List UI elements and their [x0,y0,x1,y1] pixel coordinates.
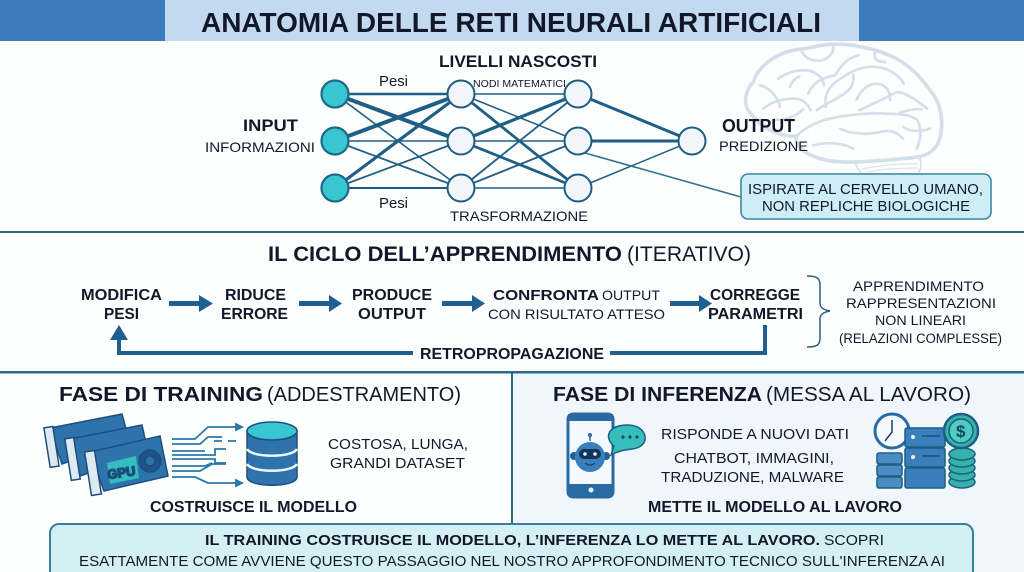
step: confronta output: OUTPUT [602,287,660,303]
network labels: NODI MATEMATICI [473,79,566,90]
step: modifica pesi [81,287,162,323]
heading: inference [553,384,971,406]
text: builds the model: COSTRUISCE IL MODELLO [150,499,357,516]
neural network diagram [322,80,741,202]
text: inference uses [661,426,849,486]
heading: inference: FASE DI INFERENZA [553,384,762,406]
step: riduce errore: ERRORE [221,306,288,323]
step: confronta output: CON RISULTATO ATTESO [488,306,665,322]
step: riduce errore [221,287,288,323]
heading: learning cycle: (ITERATIVO) [627,243,751,266]
speech bubble [608,425,645,455]
network labels: INPUT [243,116,299,135]
step: produce output [352,287,432,323]
step: modifica pesi: MODIFICA [81,287,162,304]
network labels: Pesi [379,195,408,212]
weights: input to hidden 1 [335,94,461,188]
step: confronta output [488,287,665,322]
network labels [205,52,808,224]
text: inference uses: RISPONDE A NUOVI DATI [661,426,849,443]
text: inference uses: CHATBOT, IMMAGINI, [674,450,834,467]
gpu card middle [65,425,148,480]
step: riduce errore: RIDUCE [225,287,286,304]
arrow: backpropagation loop [110,325,765,353]
icon: phone with chatbot [568,414,645,497]
text: non-linear representations: (RELAZIONI COMPLESSE) [839,331,1002,346]
callout: brain inspiration [741,174,991,219]
callout: brain inspiration: NON REPLICHE BIOLOGICHE [762,198,970,215]
heading: training [59,384,461,406]
large server [905,428,945,488]
panel: inference background [512,373,1024,572]
network labels: TRASFORMAZIONE [450,208,588,224]
icon: clock servers coins [875,414,978,488]
heading: training: FASE DI TRAINING [59,384,263,406]
text: inference uses: TRADUZIONE, MALWARE [661,469,844,486]
step: corregge parametri: PARAMETRI [708,306,803,323]
step: modifica pesi: PESI [104,306,139,323]
gpu card back [44,414,129,467]
gpu card front: GPU [106,463,136,482]
header band [0,0,1024,41]
coin stack: $ [956,422,966,441]
heading: inference: (MESSA AL LAVORO) [766,384,971,406]
hidden and output nodes [448,80,706,202]
small server [877,453,902,488]
callout connector [585,153,741,197]
icon: data flow [172,424,242,486]
network labels: LIVELLI NASCOSTI [439,52,597,71]
step: corregge parametri: CORREGGE [710,287,800,304]
text: puts the model to work: METTE IL MODELLO AL LAVORO [648,499,902,516]
clock [875,414,909,448]
callout: bottom takeaway: ESATTAMENTE COME AVVIENE QUESTO PASSAGGIO NEL NOSTRO APPROFONDIMENTO TECNICO SULL'INFERENZA AI [79,553,945,570]
cycle arrows [169,295,712,312]
callout: bottom takeaway [50,524,973,572]
network labels: PREDIZIONE [719,138,808,154]
text: non-linear representations: APPRENDIMENTO [853,278,984,294]
text: non-linear representations [839,278,1002,346]
text: training traits [328,437,468,472]
network labels: Pesi [379,73,408,90]
text: training traits: GRANDI DATASET [330,456,465,472]
label: retropropagazione: RETROPROPAGAZIONE [420,346,604,363]
callout: bottom takeaway: IL TRAINING COSTRUISCE IL MODELLO, L’INFERENZA LO METTE AL LAVORO. [205,532,820,549]
weights: hidden 1 to hidden 2 [461,94,578,188]
input nodes [322,80,348,202]
cycle steps [81,287,803,323]
text: training traits: COSTOSA, LUNGA, [328,437,468,453]
step: corregge parametri [708,287,803,323]
step: confronta output: CONFRONTA [493,287,599,304]
network labels: OUTPUT [722,116,795,136]
weights: hidden 2 to output [578,94,692,188]
step: produce output: OUTPUT [358,306,426,323]
robot [570,433,610,472]
text: non-linear representations: NON LINEARI [875,312,966,328]
title: ANATOMIA DELLE RETI NEURALI ARTIFICIALI [201,7,821,38]
text: non-linear representations: RAPPRESENTAZIONI [846,295,996,311]
step: produce output: PRODUCE [352,287,432,304]
icon: brain outline [746,44,942,174]
callout: brain inspiration: ISPIRATE AL CERVELLO UMANO, [748,181,983,198]
heading: learning cycle: IL CICLO DELL’APPRENDIMENTO [268,243,622,266]
bracket [807,276,830,347]
network labels: INFORMAZIONI [205,139,315,155]
heading: training: (ADDESTRAMENTO) [267,384,461,406]
icon: gpu cards [44,414,168,496]
callout: bottom takeaway: SCOPRI [824,532,884,549]
icon: database [247,422,297,485]
